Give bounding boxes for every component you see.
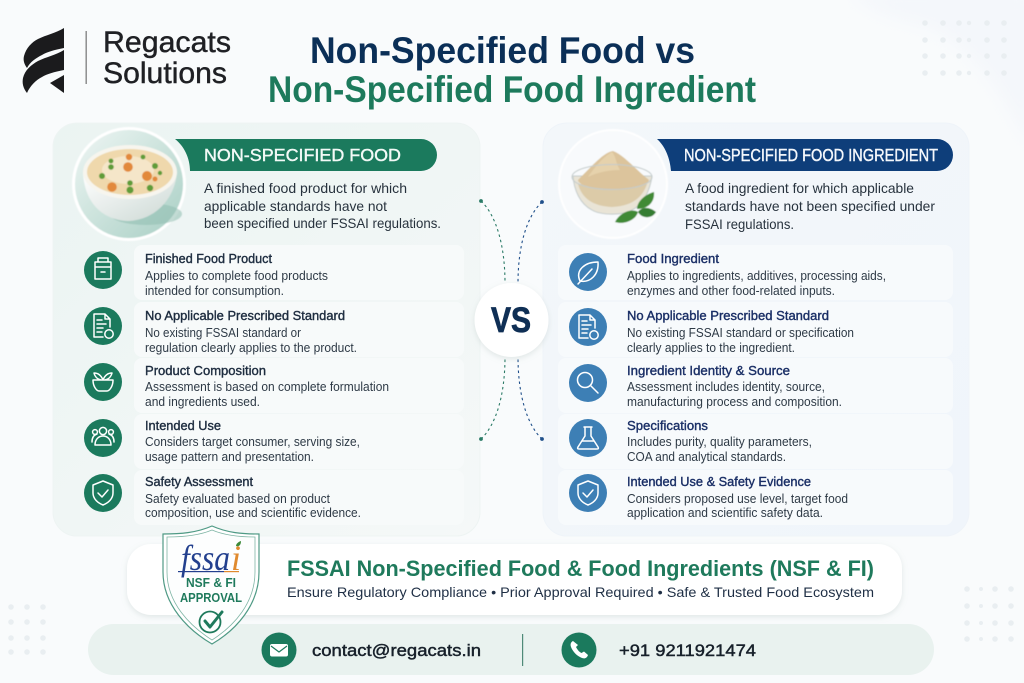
definition text [685, 180, 935, 232]
row: no applicable prescribed standard [84, 302, 464, 357]
row: no applicable prescribed standard: clearly applies to the ingredient. [627, 341, 795, 355]
definition text: standards have not been specified under [685, 198, 935, 214]
logo divider [86, 31, 87, 84]
fssai wordmark: fssa [181, 538, 230, 578]
title: Non-Specified Food vs [310, 30, 695, 71]
row: specifications [558, 414, 953, 469]
ribbon heading [175, 139, 437, 171]
row: food ingredient: Food Ingredient [627, 251, 719, 266]
badge: FSSAI NSF and FI approval shield: APPROVAL [180, 591, 242, 605]
photo: powder in glass bowl [559, 130, 667, 238]
panel: non-specified food [53, 123, 480, 536]
definition text: applicable standards have not [204, 198, 387, 214]
row: intended use and safety evidence: Intended Use & Safety Evidence [627, 474, 811, 489]
row: ingredient identity and source: manufacturing process and composition. [627, 395, 842, 409]
fssai wordmark: i [231, 538, 241, 578]
row: intended use: Intended Use [145, 418, 221, 433]
logo wordmark: Solutions [103, 57, 227, 90]
connectors: dotted curves to VS badge [479, 199, 544, 441]
row: no applicable prescribed standard: No existing FSSAI standard or specification [627, 326, 854, 340]
row: finished food product [84, 245, 464, 300]
row: intended use and safety evidence: Considers proposed use level, target food [627, 492, 848, 506]
phone number: +91 9211921474 [619, 641, 756, 660]
row: specifications: Includes purity, quality parameters, [627, 435, 812, 449]
row: safety assessment [84, 470, 464, 525]
photo: bowl of food [72, 127, 186, 241]
badge: FSSAI NSF and FI approval shield: NSF & FI [186, 576, 236, 590]
row: food ingredient [558, 245, 953, 300]
row: product composition: and ingredients used. [145, 395, 260, 409]
ribbon heading: NON-SPECIFIED FOOD INGREDIENT [684, 145, 938, 165]
row: intended use and safety evidence [558, 470, 953, 525]
title: Non-Specified Food Ingredient [268, 69, 756, 110]
banner: FSSAI NSF and FI [127, 544, 902, 615]
logo: Regacats Solutions [23, 26, 231, 93]
row: finished food product: Finished Food Product [145, 251, 272, 266]
icon: logo mark [23, 28, 64, 93]
row: no applicable prescribed standard [558, 302, 953, 357]
logo wordmark: Regacats [103, 26, 231, 59]
VS badge [474, 283, 548, 357]
row: no applicable prescribed standard: No Applicable Prescribed Standard [627, 308, 829, 323]
row: food ingredient: Applies to ingredients, additives, processing aids, [627, 269, 886, 283]
row: intended use and safety evidence: application and scientific safety data. [627, 506, 823, 520]
row: finished food product: intended for consumption. [145, 284, 284, 298]
definition text: FSSAI regulations. [685, 216, 794, 232]
banner: FSSAI NSF and FI: Ensure Regulatory Compliance • Prior Approval Required • Safe & Trusted Food Ecosystem [287, 585, 874, 600]
icon: phone [562, 632, 596, 668]
row: ingredient identity and source: Ingredient Identity & Source [627, 363, 790, 378]
panel: non-specified food ingredient [543, 123, 969, 536]
contact bar [88, 624, 934, 675]
row: ingredient identity and source [558, 358, 953, 413]
row: finished food product: Applies to complete food products [145, 269, 328, 283]
definition text: A food ingredient for which applicable [685, 180, 914, 196]
definition text: been specified under FSSAI regulations. [204, 215, 441, 231]
banner: FSSAI NSF and FI: FSSAI Non-Specified Food & Food Ingredients (NSF & FI) [287, 556, 874, 581]
icon: mail [262, 632, 296, 668]
row: specifications: Specifications [627, 418, 708, 433]
row: product composition: Assessment is based on complete formulation [145, 380, 389, 394]
row: product composition [84, 358, 464, 413]
definition text: A finished food product for which [204, 180, 407, 196]
row: intended use: usage pattern and presentation. [145, 450, 314, 464]
row: safety assessment: Safety Assessment [145, 474, 253, 489]
row: no applicable prescribed standard: No existing FSSAI standard or [145, 326, 301, 340]
icon: check [200, 612, 222, 632]
row: product composition: Product Composition [145, 363, 266, 378]
row: intended use [84, 414, 464, 469]
row: safety assessment: Safety evaluated based on product [145, 492, 330, 506]
row: food ingredient: enzymes and other food-related inputs. [627, 284, 835, 298]
logo wordmark [103, 26, 231, 90]
row: intended use: Considers target consumer, serving size, [145, 435, 360, 449]
definition text [204, 180, 441, 231]
title [268, 30, 756, 110]
row: no applicable prescribed standard: regulation clearly applies to the product. [145, 341, 357, 355]
email address: contact@regacats.in [312, 641, 481, 660]
ribbon heading: NON-SPECIFIED FOOD [204, 145, 401, 165]
row: no applicable prescribed standard: No Applicable Prescribed Standard [145, 308, 345, 323]
row: specifications: COA and analytical standards. [627, 450, 786, 464]
ribbon heading [657, 139, 953, 171]
badge: FSSAI NSF and FI approval shield [163, 526, 259, 644]
row: safety assessment: composition, use and scientific evidence. [145, 506, 361, 520]
row: ingredient identity and source: Assessment includes identity, source, [627, 380, 825, 394]
VS badge: VS [491, 301, 531, 340]
